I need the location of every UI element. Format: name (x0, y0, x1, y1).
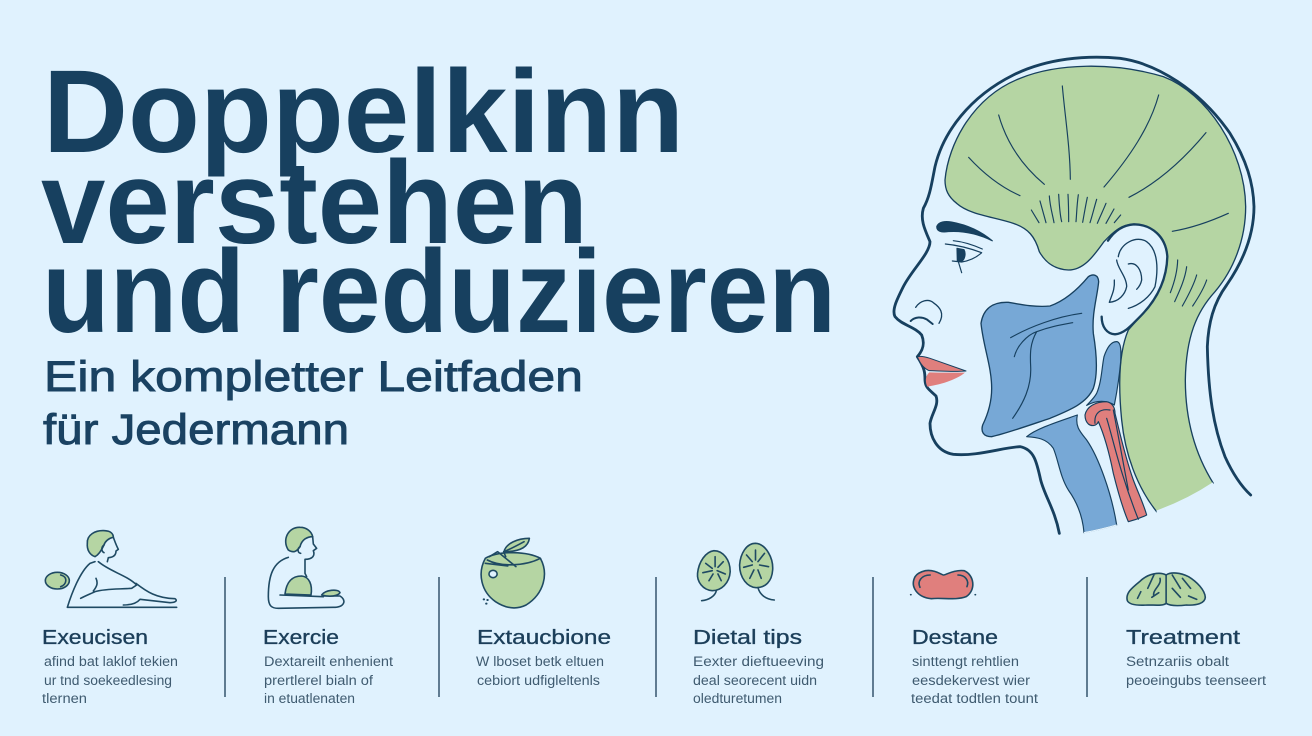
illustration: head profile anatomy (894, 57, 1254, 533)
column 5 text (911, 627, 1038, 706)
column 4 text: oledturetumen (693, 691, 782, 706)
column 1 text: afind bat laklof tekien (44, 654, 178, 669)
column 6 text (1126, 627, 1266, 688)
icon: person holding object (268, 527, 344, 608)
column 4 text: deal seorecent uidn (693, 673, 817, 688)
column 3 text: W lboset betk eltuen (476, 654, 604, 669)
red windpipe (1085, 402, 1147, 522)
title: und reduzieren (42, 226, 836, 358)
column 3 text: cebiort udfigleltenls (477, 673, 600, 688)
subtitle: für Jedermann (43, 406, 349, 454)
ear (1102, 224, 1167, 334)
dividers (225, 577, 1087, 697)
scalp lines (969, 86, 1228, 306)
blue jaw muscle (981, 275, 1099, 437)
column 5 text: teedat todtlen tount (911, 691, 1038, 706)
column 5 text: Destane (912, 627, 998, 649)
column 2 text: Dextareilt enhenient (264, 654, 393, 669)
title: Doppelkinn (43, 46, 684, 178)
subtitle (43, 353, 583, 454)
column 6 text: Treatment (1126, 627, 1241, 649)
column 1 text: ur tnd soekeedlesing (44, 673, 172, 688)
column 1 text: Exeucisen (42, 627, 148, 649)
lips (917, 356, 966, 387)
column 5 text: sinttengt rehtlien (912, 654, 1019, 669)
nose detail (911, 300, 942, 324)
column 3 text: Extaucbione (477, 627, 611, 649)
icon: person sitting (45, 531, 177, 607)
column 2 text: Exercie (263, 627, 339, 649)
column 1 text: tlernen (42, 691, 87, 706)
title (41, 46, 836, 358)
column 6 text: peoeingubs teenseert (1126, 673, 1266, 688)
outer head outline (894, 57, 1254, 533)
eyebrow (937, 221, 993, 241)
eye (945, 241, 982, 273)
icon: apple (481, 538, 544, 608)
white edge of the green base (1157, 483, 1213, 512)
column 6 text: Setnzariis obalt (1126, 654, 1229, 669)
column 4 text: Eexter dieftueeving (693, 654, 824, 669)
column 2 text: in etuatlenaten (264, 691, 355, 706)
column 4 text: Dietal tips (693, 627, 802, 649)
subtitle: Ein kompletter Leitfaden (44, 353, 583, 401)
blue throat upper (1087, 342, 1121, 405)
column 2 text (263, 627, 393, 706)
icon: brain (1127, 573, 1205, 606)
icon: red bean (911, 570, 976, 599)
green scalp and neck region (945, 66, 1246, 512)
column 4 text (693, 627, 824, 706)
icon: two seeds (697, 543, 774, 601)
column 5 text: eesdekervest wier (912, 673, 1031, 688)
column 1 text (42, 627, 178, 706)
column 2 text: prertlerel bialn of (264, 673, 373, 688)
icon group: people (45, 527, 344, 608)
blue throat lower (1027, 415, 1117, 533)
title: verstehen (41, 137, 588, 269)
column 3 text (476, 627, 611, 688)
icon group: right three (697, 543, 1205, 606)
